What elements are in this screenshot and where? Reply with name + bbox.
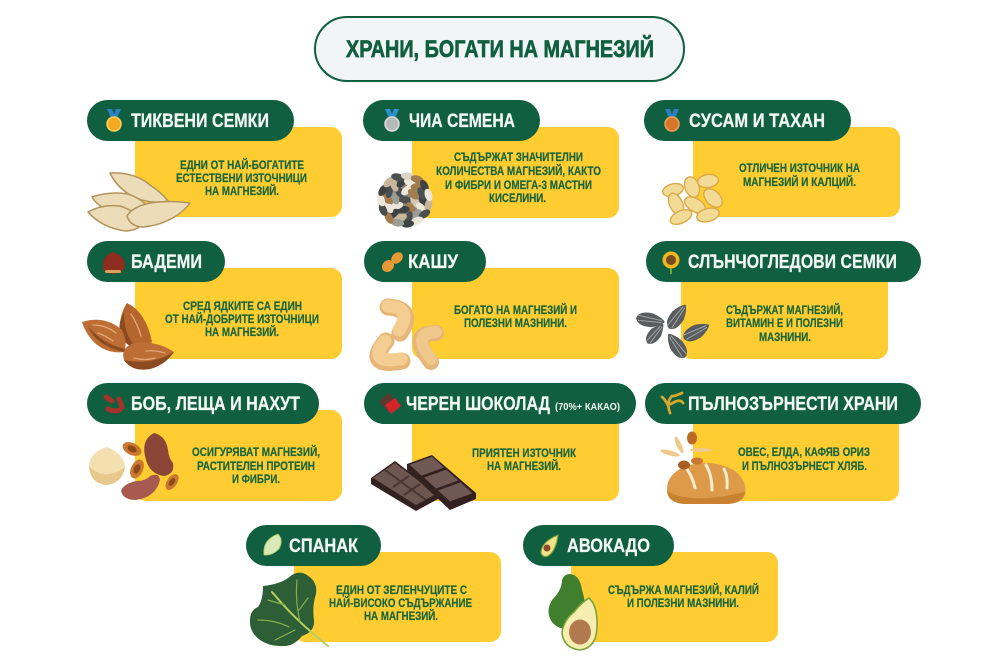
label: whole grains: ПЪЛНОЗЪРНЕСТИ ХРАНИ (688, 393, 898, 415)
icon: chocolate bar (379, 393, 401, 414)
description: chia seeds: И ФИБРИ И ОМЕГА-3 МАСТНИ (445, 178, 592, 192)
icon: peanut (380, 250, 405, 274)
icon: lettuce leaf (264, 534, 281, 555)
description: sunflower seeds: ВИТАМИН Е И ПОЛЕЗНИ (726, 316, 843, 330)
description: spinach (329, 583, 472, 623)
label: chia seeds: ЧИА СЕМЕНА (409, 110, 515, 132)
illustration: sesame seeds (661, 173, 726, 227)
description: pumpkin seeds: ЕСТЕСТВЕНИ ИЗТОЧНИЦИ (176, 171, 307, 185)
description: whole grains: И ПЪЛНОЗЪРНЕСТ ХЛЯБ. (742, 459, 867, 473)
label: pumpkin seeds: ТИКВЕНИ СЕМКИ (131, 110, 269, 132)
description: almonds: СРЕД ЯДКИТЕ СА ЕДИН (183, 299, 302, 313)
description: sesame and tahini (739, 161, 860, 189)
description: spinach: ЕДИН ОТ ЗЕЛЕНЧУЦИТЕ С (336, 583, 467, 597)
description: almonds: ОТ НАЙ-ДОБРИТЕ ИЗТОЧНИЦИ (165, 311, 319, 326)
card: pumpkin seeds (87, 100, 342, 231)
card: sesame and tahini (644, 100, 900, 227)
description: avocado: И ПОЛЕЗНИ МАЗНИНИ. (627, 596, 739, 610)
label: spinach: СПАНАК (289, 535, 358, 557)
description: spinach: НА МАГНЕЗИЙ. (364, 608, 438, 623)
card: spinach (246, 525, 501, 646)
label: almonds: БАДЕМИ (131, 251, 202, 273)
label: cashew: КАШУ (408, 251, 459, 273)
description: sunflower seeds (726, 302, 843, 344)
card: almonds (82, 241, 342, 370)
description: chia seeds: КОЛИЧЕСТВА МАГНЕЗИЙ, КАКТО (436, 163, 601, 178)
description: beans, lentils and chickpeas: И ФИБРИ. (232, 472, 280, 486)
card: sunflower seeds (635, 241, 921, 362)
description: spinach: НАЙ-ВИСОКО СЪДЪРЖАНИЕ (329, 595, 472, 610)
label: sesame and tahini: СУСАМ И ТАХАН (689, 110, 825, 132)
title (315, 17, 684, 81)
description: beans, lentils and chickpeas (192, 444, 320, 486)
description: chia seeds: СЪДЪРЖАТ ЗНАЧИТЕЛНИ (454, 150, 583, 164)
description: chia seeds (436, 150, 601, 205)
description: chia seeds: КИСЕЛИНИ. (489, 191, 546, 205)
label note: cocoa percentage: (70%+ КАКАО) (555, 402, 620, 413)
description: cashew: ПОЛЕЗНИ МАЗНИНИ. (464, 316, 567, 330)
illustration: chocolate (371, 455, 476, 511)
description: sunflower seeds: МАЗНИНИ. (759, 330, 811, 344)
description: whole grains: ОВЕС, ЕЛДА, КАФЯВ ОРИЗ (738, 445, 870, 459)
illustration: beans and chickpea (89, 433, 181, 500)
card: beans, lentils and chickpeas (87, 383, 342, 501)
description: dark chocolate: ПРИЯТЕН ИЗТОЧНИК (472, 446, 576, 460)
icon: sunflower (662, 252, 680, 274)
card: avocado (523, 525, 778, 650)
illustration: cashews (378, 306, 436, 362)
description: avocado (608, 582, 759, 610)
description: avocado: СЪДЪРЖА МАГНЕЗИЙ, КАЛИЙ (608, 582, 759, 597)
icon: red beans (106, 397, 122, 411)
description: almonds: НА МАГНЕЗИЙ. (205, 324, 279, 339)
illustration: bread and grains (660, 432, 746, 504)
title: ХРАНИ, БОГАТИ НА МАГНЕЗИЙ (346, 35, 654, 63)
label: dark chocolate: ЧЕРЕН ШОКОЛАД (406, 393, 550, 415)
description: whole grains (738, 445, 870, 473)
description: dark chocolate: НА МАГНЕЗИЙ. (487, 458, 561, 473)
label: beans, lentils and chickpeas: БОБ, ЛЕЩА И НАХУТ (131, 393, 300, 415)
description: sesame and tahini: МАГНЕЗИЙ И КАЛЦИЙ. (743, 174, 856, 189)
icon: bronze medal (665, 109, 679, 131)
illustration: avocado (548, 574, 597, 650)
icon: gold medal (107, 109, 121, 131)
icon: wheat (662, 393, 683, 413)
icon: avocado (541, 535, 558, 557)
label: sunflower seeds: СЛЪНЧОГЛЕДОВИ СЕМКИ (688, 251, 897, 273)
description: cashew: БОГАТО НА МАГНЕЗИЙ И (454, 302, 577, 317)
card: cashew (364, 241, 619, 362)
description: beans, lentils and chickpeas: ОСИГУРЯВАТ МАГНЕЗИЙ, (192, 444, 320, 459)
illustration: chia seeds (375, 172, 434, 228)
description: dark chocolate (472, 446, 576, 473)
description: sunflower seeds: СЪДЪРЖАТ МАГНЕЗИЙ, (726, 302, 843, 317)
description: almonds (165, 299, 319, 339)
card: chia seeds (363, 100, 619, 228)
illustration: spinach leaf (250, 573, 328, 646)
description: pumpkin seeds: НА МАГНЕЗИЙ. (205, 183, 279, 198)
description: beans, lentils and chickpeas: РАСТИТЕЛЕН ПРОТЕИН (197, 459, 315, 473)
description: cashew (454, 302, 577, 330)
label: avocado: АВОКАДО (567, 535, 650, 557)
description: pumpkin seeds: ЕДНИ ОТ НАЙ-БОГАТИТЕ (180, 157, 304, 172)
icon: silver medal (385, 109, 399, 131)
description: pumpkin seeds (176, 157, 307, 198)
description: sesame and tahini: ОТЛИЧЕН ИЗТОЧНИК НА (739, 161, 860, 175)
illustration: sunflower seeds (635, 301, 713, 362)
card: whole grains (645, 383, 921, 504)
illustration: almonds (82, 303, 174, 370)
icon: chestnut (103, 252, 125, 274)
illustration: pumpkin seeds (88, 173, 190, 231)
card: dark chocolate (364, 383, 636, 511)
